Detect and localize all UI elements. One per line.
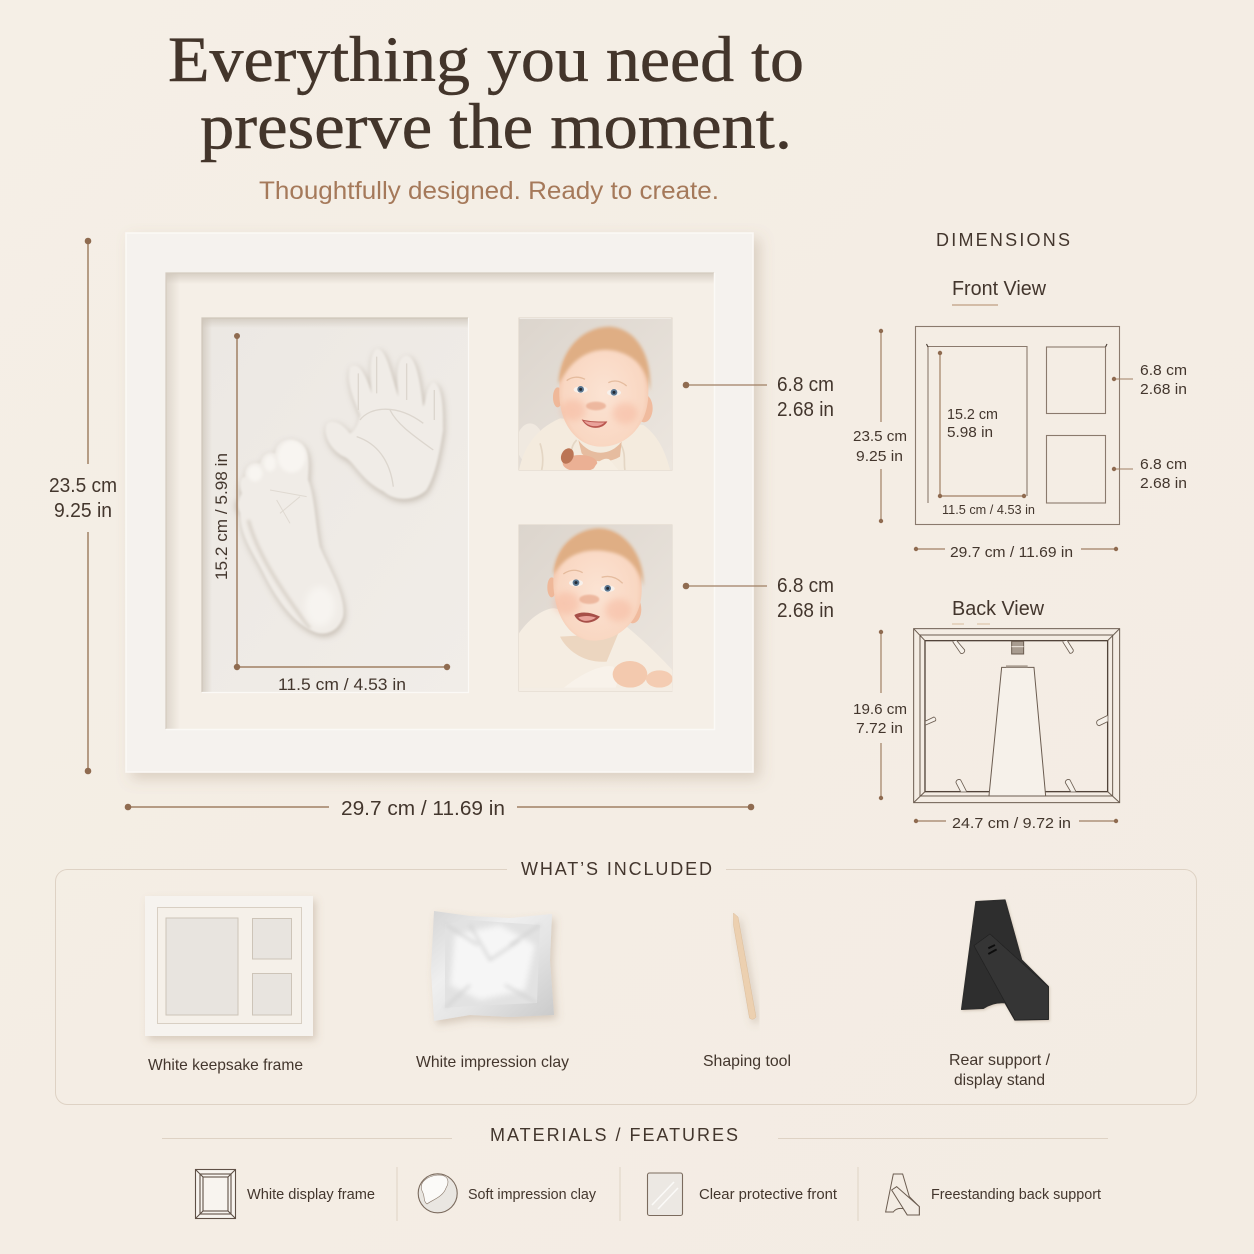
photo window: baby top	[517, 318, 672, 472]
main height dimension	[49, 238, 117, 774]
item: shaping tool image	[734, 913, 756, 1019]
feature label: clay: Soft impression clay	[468, 1186, 596, 1203]
back view dimensions: 19.6 cm	[853, 701, 907, 718]
title	[168, 24, 804, 163]
main height dimension: 23.5 cm	[49, 475, 117, 497]
item: keepsake frame image	[145, 896, 313, 1036]
clay impression panel	[202, 318, 468, 694]
front view dimensions: 9.25 in	[856, 448, 903, 465]
item label: keepsake frame: White keepsake frame	[148, 1057, 303, 1074]
bottom photo dimension: 2.68 in	[777, 600, 834, 622]
photo window: baby bottom	[519, 525, 673, 691]
main keepsake frame	[126, 233, 753, 772]
item: clay packet image	[431, 911, 554, 1021]
item label: clay: White impression clay	[416, 1054, 569, 1071]
top photo dimension: 6.8 cm	[777, 374, 834, 396]
front view dimensions: 2.68 in	[1140, 475, 1187, 492]
heading: what's included: WHAT’S INCLUDED	[521, 859, 712, 879]
top photo dimension: 2.68 in	[777, 399, 834, 421]
dimensions heading: DIMENSIONS	[936, 230, 1070, 250]
materials heading: MATERIALS / FEATURES	[490, 1125, 738, 1145]
main width dimension	[125, 798, 754, 820]
handprint imprint	[325, 348, 445, 502]
main height dimension: 9.25 in	[54, 500, 112, 522]
back view dimensions	[853, 630, 1118, 832]
clay height dimension	[212, 333, 450, 670]
icon: white display frame	[196, 1170, 236, 1218]
front view dimensions: 6.8 cm	[1140, 456, 1187, 473]
feature label: frame: White display frame	[247, 1186, 375, 1203]
title: Everything you need to	[168, 24, 804, 96]
back view diagram	[914, 629, 1120, 803]
clips	[926, 641, 1108, 792]
icon: soft clay	[418, 1174, 457, 1213]
front view dimensions: 29.7 cm / 11.69 in	[950, 544, 1073, 561]
back view dimensions: 24.7 cm / 9.72 in	[952, 815, 1071, 832]
front view dimensions: 11.5 cm / 4.53 in	[942, 502, 1035, 517]
item label: rear stand: display stand	[954, 1072, 1045, 1089]
icon: freestanding support	[886, 1174, 919, 1215]
subtitle: Thoughtfully designed. Ready to create.	[259, 177, 719, 205]
feature label: clear front: Clear protective front	[699, 1186, 838, 1203]
back view dimensions: 7.72 in	[856, 720, 903, 737]
item: rear stand image	[962, 900, 1048, 1020]
clay height dimension: 15.2 cm / 5.98 in	[212, 453, 231, 580]
panel: what's included	[55, 859, 1196, 1104]
title: preserve the moment.	[200, 91, 792, 163]
front view dimensions: 2.68 in	[1140, 381, 1187, 398]
front view dimensions: 23.5 cm	[853, 428, 907, 445]
footprint imprint	[236, 439, 345, 636]
front view dimensions	[853, 329, 1187, 561]
clay width label: 11.5 cm / 4.53 in	[278, 675, 406, 694]
bottom photo dimension: 6.8 cm	[777, 575, 834, 597]
top photo dimension	[683, 374, 834, 421]
front view heading: Front View	[952, 278, 1047, 300]
item label: shaping tool: Shaping tool	[703, 1053, 791, 1070]
item label: rear stand: Rear support /	[949, 1052, 1051, 1069]
front view dimensions: 6.8 cm	[1140, 362, 1187, 379]
back view heading: Back View	[952, 598, 1045, 620]
main width dimension: 29.7 cm / 11.69 in	[341, 798, 505, 820]
bottom photo dimension	[683, 575, 834, 622]
item label: rear stand	[949, 1052, 1051, 1089]
frame inner bevel and mat	[166, 273, 714, 730]
feature label: back support: Freestanding back support	[931, 1186, 1102, 1203]
icon: clear protective front	[648, 1173, 682, 1216]
front view diagram	[916, 326, 1120, 524]
front view dimensions: 15.2 cm	[947, 406, 998, 423]
front view dimensions: 5.98 in	[947, 424, 993, 441]
